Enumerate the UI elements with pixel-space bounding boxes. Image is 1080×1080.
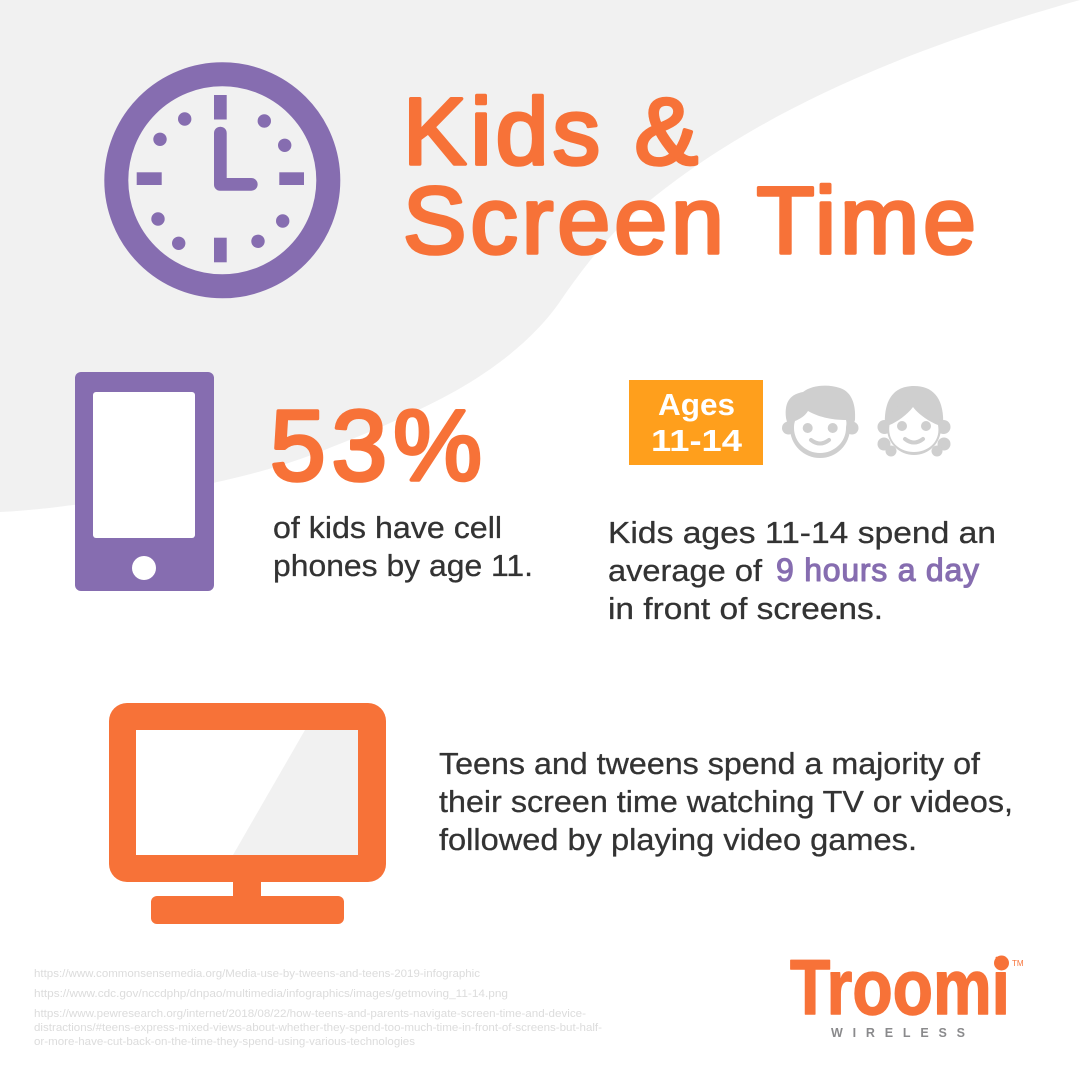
- text: cell phones: phones by age 11.: [273, 548, 533, 583]
- source links: or-more-have-cut-back-on-the-time-they-spend-using-various-technologies: [34, 1036, 416, 1048]
- icon: phone: [75, 372, 214, 591]
- badge: ages 11-14: [629, 380, 763, 465]
- text: teens and tweens: followed by playing video games.: [439, 822, 917, 857]
- badge: ages 11-14: Ages: [658, 387, 735, 422]
- title: Kids &: [403, 79, 698, 185]
- source links: https://www.pewresearch.org/internet/2018/08/22/how-teens-and-parents-navigate-screen-time-and-device-: [34, 1008, 586, 1020]
- title: [403, 79, 976, 274]
- stat: 53 percent: 53%: [270, 390, 482, 502]
- logo: Troomi Wireless: TM: [1012, 959, 1024, 968]
- text: cell phones: of kids have cell: [273, 510, 502, 545]
- text: nine hours a day: [608, 515, 996, 626]
- icon: boy face: [782, 386, 858, 458]
- logo: Troomi Wireless: Troomi: [790, 943, 1010, 1031]
- text: nine hours a day: in front of screens.: [608, 591, 883, 626]
- text: teens and tweens: Teens and tweens spend a majority of: [439, 746, 980, 781]
- icon: girl face: [878, 386, 950, 456]
- logo: Troomi Wireless: WIRELESS: [831, 1026, 965, 1040]
- source links: [34, 968, 602, 1048]
- source links: https://www.commonsensemedia.org/Media-use-by-tweens-and-teens-2019-infographic: [34, 968, 481, 980]
- text: teens and tweens: their screen time watching TV or videos,: [439, 784, 1013, 819]
- text: nine hours a day: Kids ages 11-14 spend an: [608, 515, 996, 550]
- text: teens and tweens: [439, 746, 1013, 857]
- icon: clock: [116, 74, 328, 286]
- source links: https://www.cdc.gov/nccdphp/dnpao/multimedia/infographics/images/getmoving_11-14.png: [34, 988, 508, 1000]
- text: nine hours a day: 9 hours a day: [776, 552, 979, 588]
- badge: ages 11-14: 11-14: [651, 423, 743, 458]
- background swoosh: [0, 0, 1080, 512]
- icon: television: [109, 703, 386, 924]
- text: nine hours a day: average of: [608, 553, 762, 588]
- title: Screen Time: [403, 168, 976, 274]
- text: cell phones: [273, 510, 533, 583]
- source links: distractions/#teens-express-mixed-views-about-whether-they-spend-too-much-time-in-front-of-screens-but-half-: [34, 1022, 602, 1034]
